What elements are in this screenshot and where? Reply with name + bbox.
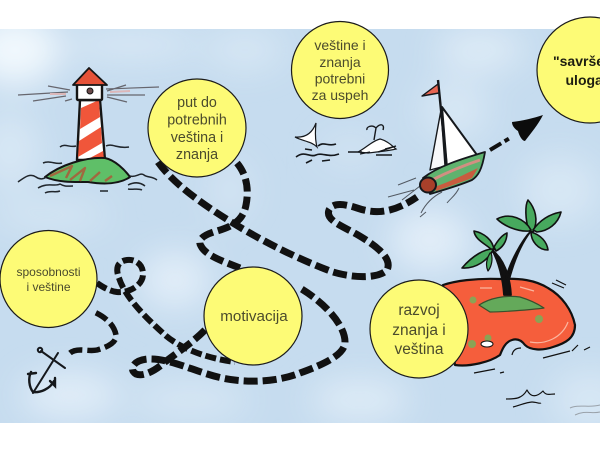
circle: razvoj znanja i veština: veština xyxy=(394,341,444,358)
island body xyxy=(443,279,575,365)
circle: veštine i znanja potrebni za uspeh xyxy=(292,22,388,118)
circle: put do potrebnih veština i znanja: potrebnih xyxy=(167,112,227,128)
island water marks xyxy=(474,280,590,407)
rock island xyxy=(45,158,130,183)
lighthouse rays xyxy=(18,85,159,102)
moss spots xyxy=(468,296,543,348)
waves xyxy=(18,145,157,193)
circle: put do potrebnih veština i znanja: znanja xyxy=(176,147,218,163)
anchor stock xyxy=(41,351,65,368)
small rock xyxy=(481,341,493,347)
circle: put do potrebnih veština i znanja xyxy=(148,79,246,177)
route: anchor to abilities xyxy=(70,311,116,353)
tower stripes xyxy=(78,100,104,159)
route: boat to arrow xyxy=(490,138,510,150)
arrow head xyxy=(512,115,543,141)
whale xyxy=(358,139,396,153)
hull stern xyxy=(420,178,436,192)
mast xyxy=(438,80,447,170)
circle: sposobnosti i veštine: i veštine xyxy=(26,280,71,294)
circle: razvoj znanja i veština: razvoj xyxy=(398,302,440,319)
anchor ring xyxy=(38,348,42,352)
jib sail xyxy=(430,110,445,170)
circle: motivacija xyxy=(204,267,302,365)
pennant xyxy=(422,84,439,96)
lamp room xyxy=(77,84,102,100)
palm trunks xyxy=(492,231,531,295)
whale tail xyxy=(295,123,317,147)
route: first circle through loop to boat xyxy=(158,162,417,277)
icons: whale tail and whale xyxy=(295,123,396,163)
circle: razvoj znanja i veština: znanja i xyxy=(392,322,446,339)
anchor shank xyxy=(33,353,58,393)
circle: sposobnosti i veštine xyxy=(0,230,97,328)
circle: put do potrebnih veština i znanja: veština i xyxy=(171,130,223,146)
tail waves xyxy=(296,144,339,163)
whale spout xyxy=(367,125,383,140)
circle: savršena uloga xyxy=(537,17,600,123)
roof xyxy=(73,68,107,85)
lighthouse tower xyxy=(77,100,105,160)
wake lines xyxy=(388,178,459,217)
whale waves xyxy=(348,146,396,155)
signature scribble xyxy=(570,405,600,415)
lamp xyxy=(87,88,93,94)
route: first circle to motivation xyxy=(200,163,247,268)
palm leaves right xyxy=(526,200,536,232)
icon: anchor xyxy=(28,348,65,393)
hull stripe xyxy=(432,160,480,180)
island highlights xyxy=(480,287,568,343)
circle: veštine i znanja potrebni za uspeh: potrebni xyxy=(315,70,365,86)
circle: motivacija: motivacija xyxy=(220,308,288,325)
inner green mound xyxy=(479,296,544,312)
icon: sailboat xyxy=(388,80,485,217)
circle: veštine i znanja potrebni za uspeh: znanja xyxy=(319,54,361,70)
circle: put do potrebnih veština i znanja: put do xyxy=(177,95,217,111)
main sail xyxy=(442,107,477,168)
circle: veštine i znanja potrebni za uspeh: veštine i xyxy=(314,37,366,53)
palm leaves left xyxy=(474,231,494,250)
icon: palm island xyxy=(443,200,600,415)
route: motivation to lower sweep xyxy=(132,288,345,381)
hull xyxy=(423,152,485,194)
island shade xyxy=(50,166,112,181)
circle: razvoj znanja i veština xyxy=(370,280,468,378)
circle: veštine i znanja potrebni za uspeh: za uspeh xyxy=(312,87,368,103)
hull lower planks xyxy=(434,168,478,191)
icon: lighthouse xyxy=(18,68,159,193)
anchor flukes xyxy=(28,372,55,392)
circle: sposobnosti i veštine: sposobnosti xyxy=(16,265,81,279)
route: abilities loop xyxy=(97,260,235,362)
dashed route xyxy=(70,138,510,381)
